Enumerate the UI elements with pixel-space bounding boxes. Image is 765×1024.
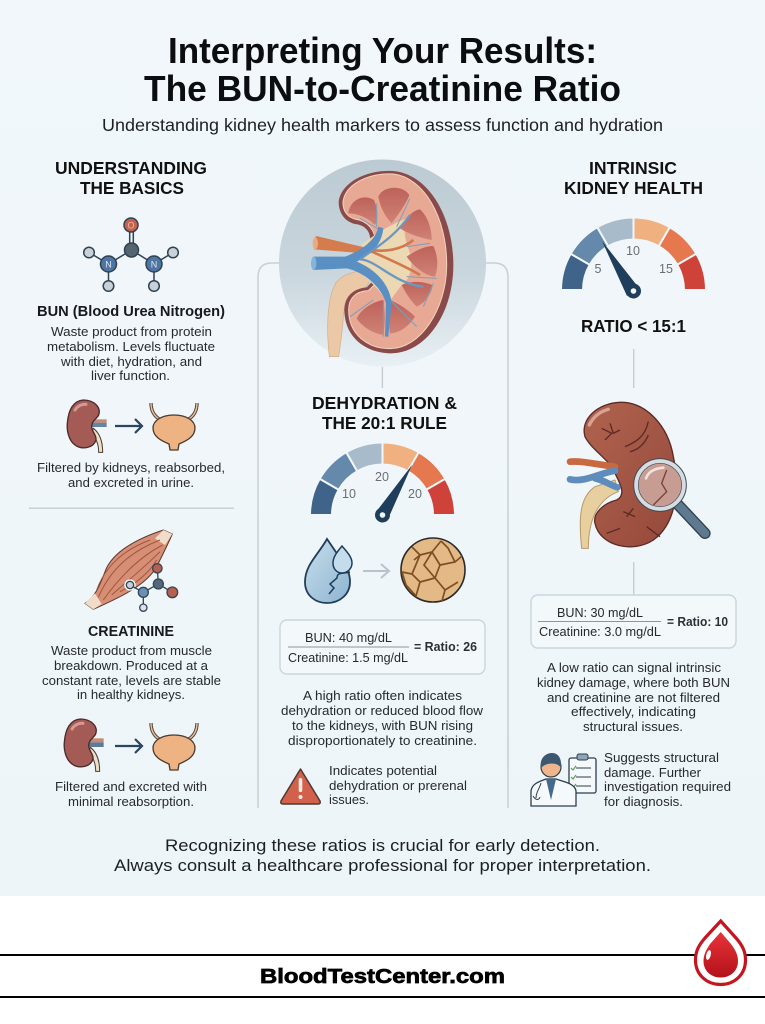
- text: high ratio explanation: dehydration or reduced blood flow: [281, 703, 484, 718]
- text: creatinine description: breakdown. Produced at a: [54, 658, 209, 673]
- text: high ratio explanation: to the kidneys, with BUN rising: [292, 718, 473, 733]
- gauge: high ratio: 20: [375, 470, 389, 484]
- icon: blood drop logo: [696, 921, 746, 984]
- icon: cracked water drop: [305, 539, 352, 603]
- text: creatinine description: in healthy kidneys.: [77, 687, 185, 702]
- title: [144, 30, 621, 109]
- icon: cracked earth: [401, 538, 465, 602]
- icon: bladder: [151, 403, 197, 450]
- text: creatinine filtering: minimal reabsorption.: [68, 794, 194, 809]
- text: creatinine description: [42, 643, 221, 702]
- footer band: BloodTestCenter.com: [260, 966, 505, 988]
- text: high ratio explanation: [281, 688, 484, 748]
- text: low ratio explanation: and creatinine are not filtered: [547, 690, 720, 705]
- formula box: low ratio: BUN: 30 mg/dL: [557, 605, 643, 620]
- heading: BUN: BUN (Blood Urea Nitrogen): [37, 304, 225, 320]
- text: BUN description: [47, 324, 215, 383]
- text: BUN description: Waste product from protein: [51, 324, 212, 339]
- text: BUN description: metabolism. Levels fluctuate: [47, 339, 215, 354]
- text: creatinine description: Waste product from muscle: [51, 643, 212, 658]
- text: structural damage note: investigation required: [604, 779, 731, 794]
- formula box: low ratio: = Ratio: 10: [667, 614, 728, 629]
- text: warning note: dehydration or prerenal: [329, 778, 467, 793]
- text: BUN description: with diet, hydration, and: [60, 354, 202, 369]
- icon: doctor with clipboard: [531, 753, 596, 806]
- icon: warning triangle: [281, 769, 320, 804]
- text: low ratio explanation: [537, 660, 730, 734]
- text: creatinine filtering: [55, 779, 207, 809]
- panel: intrinsic kidney health: [531, 158, 736, 809]
- text: warning note: Indicates potential: [329, 763, 437, 778]
- text: creatinine description: constant rate, levels are stable: [42, 673, 221, 688]
- gauge: low ratio: 10: [626, 244, 640, 258]
- heading: dehydration: [312, 393, 457, 433]
- panel: understanding the basics: [29, 158, 234, 809]
- text: low ratio explanation: structural issues.: [583, 719, 683, 734]
- text: BUN filtering: and excreted in urine.: [68, 475, 194, 490]
- icon: urea molecule: N: [151, 260, 157, 270]
- formula box: high ratio: Creatinine: 1.5 mg/dL: [288, 650, 408, 665]
- text: high ratio explanation: A high ratio often indicates: [303, 688, 463, 703]
- text: BUN filtering: [37, 460, 225, 490]
- icon: muscle with molecule: [85, 530, 178, 611]
- text: BUN filtering: Filtered by kidneys, reabsorbed,: [37, 460, 225, 475]
- text: structural damage note: for diagnosis.: [604, 794, 683, 809]
- icon: kidney small: [67, 400, 107, 452]
- arrow: [115, 419, 142, 433]
- icon: urea molecule: [84, 218, 178, 291]
- heading: intrinsic kidney health: KIDNEY HEALTH: [564, 178, 703, 198]
- icon: urea molecule: N: [105, 260, 112, 270]
- icon: bladder: [151, 723, 197, 770]
- formula box: high ratio: = Ratio: 26: [414, 639, 477, 654]
- heading: understanding the basics: [55, 158, 207, 198]
- illustration: damaged kidney with magnifier: [570, 402, 705, 548]
- gauge: high ratio: [310, 442, 455, 522]
- icon: urea molecule: O: [127, 220, 135, 230]
- closing note: Recognizing these ratios is crucial for early detection.: [165, 837, 600, 855]
- text: low ratio explanation: A low ratio can signal intrinsic: [547, 660, 721, 675]
- subtitle: Understanding kidney health markers to assess function and hydration: [102, 115, 663, 135]
- gauge: low ratio: 15: [659, 262, 673, 276]
- closing note: [114, 837, 651, 875]
- formula box: low ratio: [531, 595, 736, 648]
- arrow: [363, 564, 389, 578]
- text: warning note: issues.: [329, 792, 369, 807]
- connector line: [382, 367, 383, 388]
- icon: kidney small: [64, 719, 104, 771]
- heading: dehydration: DEHYDRATION &: [312, 393, 457, 413]
- text: creatinine filtering: Filtered and excreted with: [55, 779, 207, 794]
- text: structural damage note: damage. Further: [604, 765, 702, 780]
- heading: intrinsic kidney health: INTRINSIC: [589, 158, 677, 178]
- gauge: low ratio: 5: [595, 262, 602, 276]
- text: structural damage note: [604, 750, 731, 809]
- heading: understanding the basics: UNDERSTANDING: [55, 158, 207, 178]
- formula box: low ratio: Creatinine: 3.0 mg/dL: [539, 624, 661, 639]
- gauge: low ratio: [561, 217, 706, 298]
- text: BUN description: liver function.: [91, 368, 170, 383]
- text: high ratio explanation: disproportionately to creatinine.: [288, 733, 477, 748]
- formula box: high ratio: BUN: 40 mg/dL: [305, 630, 392, 645]
- gauge: high ratio: 20: [408, 487, 422, 501]
- heading: intrinsic kidney health: [564, 158, 703, 198]
- formula box: high ratio: [280, 620, 485, 674]
- illustration: kidney cross-section: [279, 160, 486, 366]
- text: warning note: [329, 763, 467, 807]
- text: low ratio explanation: effectively, indicating: [571, 704, 696, 719]
- heading: understanding the basics: THE BASICS: [80, 178, 184, 198]
- label: ratio threshold: RATIO < 15:1: [581, 316, 686, 336]
- text: low ratio explanation: kidney damage, where both BUN: [537, 675, 730, 690]
- arrow: [115, 739, 142, 753]
- heading: creatinine: CREATININE: [88, 624, 174, 640]
- text: structural damage note: Suggests structural: [604, 750, 719, 765]
- title: Interpreting Your Results:: [168, 30, 597, 71]
- heading: dehydration: THE 20:1 RULE: [322, 413, 447, 433]
- title: The BUN-to-Creatinine Ratio: [144, 68, 621, 109]
- closing note: Always consult a healthcare professional for proper interpretation.: [114, 857, 651, 875]
- gauge: high ratio: 10: [342, 487, 356, 501]
- panel: dehydration frame: [258, 263, 508, 808]
